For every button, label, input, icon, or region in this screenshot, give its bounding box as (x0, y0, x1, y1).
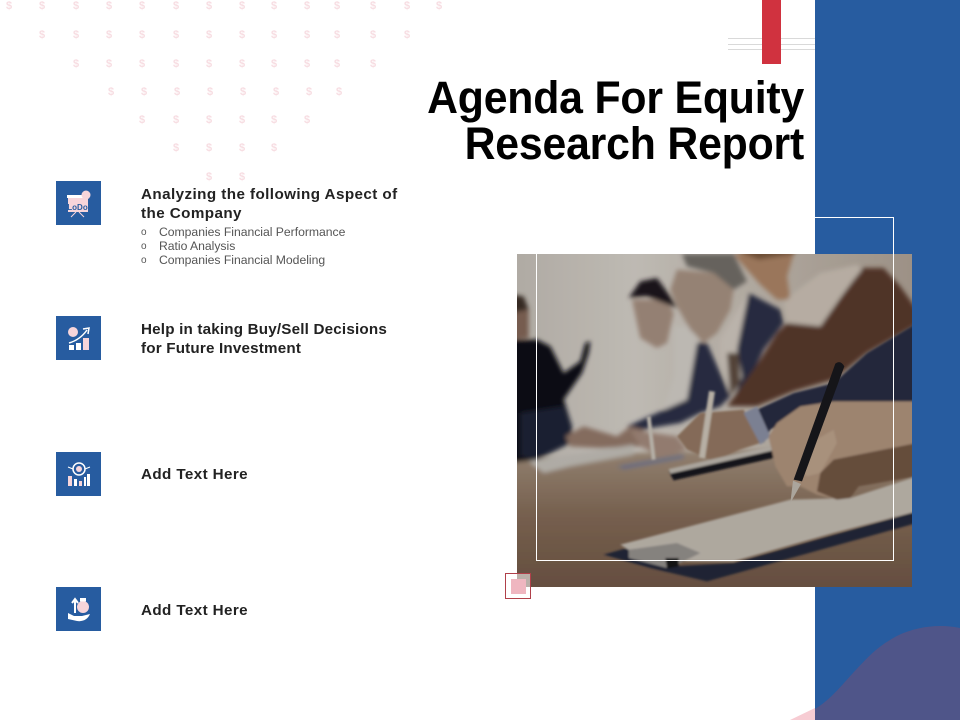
bullet list: o (141, 227, 147, 238)
dollar sign pattern: $ (173, 29, 179, 41)
dollar sign pattern: $ (139, 58, 145, 70)
dollar sign pattern: $ (239, 142, 245, 154)
dollar sign pattern: $ (206, 58, 212, 70)
heading: the Company (141, 205, 242, 222)
heading: Add Text Here (141, 466, 248, 483)
dollar sign pattern: $ (271, 29, 277, 41)
dollar sign pattern: $ (271, 0, 277, 12)
dollar sign pattern: $ (370, 29, 376, 41)
dollar sign pattern: $ (173, 114, 179, 126)
header accent: grey lines and red bar (728, 0, 815, 64)
dollar sign pattern: $ (139, 0, 145, 12)
dollar sign pattern: $ (173, 142, 179, 154)
dollar sign pattern: $ (73, 29, 79, 41)
dollar sign pattern: $ (304, 114, 310, 126)
icon: hand holding money bag (56, 587, 101, 631)
dollar sign pattern: $ (173, 0, 179, 12)
heading (141, 186, 398, 222)
dollar sign pattern: $ (206, 171, 212, 183)
title: Research Report (465, 118, 804, 169)
dollar sign pattern: $ (106, 29, 112, 41)
dollar sign pattern: $ (370, 58, 376, 70)
agenda item 3 (56, 452, 248, 496)
heading: Add Text Here (141, 602, 248, 619)
dollar sign pattern: $ (240, 86, 246, 98)
dollar sign pattern: $ (141, 86, 147, 98)
dollar sign pattern: $ (106, 58, 112, 70)
photo: business people writing at a table (517, 254, 912, 587)
dollar sign pattern: $ (106, 0, 112, 12)
dollar sign pattern: $ (139, 114, 145, 126)
pen (794, 362, 844, 481)
dollar sign pattern: $ (239, 114, 245, 126)
dollar sign pattern: $ (334, 0, 340, 12)
dollar sign pattern: $ (271, 142, 277, 154)
dollar sign pattern: $ (336, 86, 342, 98)
dollar sign pattern: $ (370, 0, 376, 12)
bullet list: Companies Financial Performance (159, 225, 345, 239)
dollar sign pattern: $ (304, 58, 310, 70)
small red square accent (505, 573, 531, 599)
dollar sign pattern: $ (239, 0, 245, 12)
bullet list (141, 225, 345, 267)
icon: target coin over bars (56, 452, 101, 496)
title: Agenda For Equity (427, 72, 804, 123)
agenda item 4 (56, 587, 248, 631)
dollar sign pattern: $ (271, 114, 277, 126)
white outline frame (536, 217, 894, 561)
bullet list: o (141, 255, 147, 266)
dollar sign pattern: $ (273, 86, 279, 98)
bullet list: Companies Financial Modeling (159, 253, 325, 267)
dollar sign pattern: $ (304, 0, 310, 12)
dollar sign pattern: $ (139, 29, 145, 41)
dollar sign pattern: $ (108, 86, 114, 98)
agenda item 1 (56, 181, 398, 267)
dollar sign pattern: $ (239, 29, 245, 41)
dollar sign pattern: $ (206, 0, 212, 12)
title (427, 72, 804, 169)
agenda item 2 (56, 316, 387, 360)
dollar sign pattern: $ (39, 29, 45, 41)
dollar sign pattern: $ (6, 0, 12, 12)
dollar sign pattern: $ (173, 58, 179, 70)
blue side panel (815, 0, 960, 720)
dollar sign pattern: $ (206, 114, 212, 126)
dollar sign pattern: $ (404, 29, 410, 41)
heading (141, 321, 387, 357)
bullet list: Ratio Analysis (159, 239, 235, 253)
dollar sign pattern: $ (239, 58, 245, 70)
icon: presentation board: LoDo (67, 203, 88, 212)
dollar sign pattern: $ (206, 142, 212, 154)
heading: Help in taking Buy/Sell Decisions (141, 321, 387, 338)
dollar sign pattern: $ (306, 86, 312, 98)
dollar sign pattern: $ (207, 86, 213, 98)
dollar sign pattern (6, 0, 442, 183)
dollar sign pattern: $ (206, 29, 212, 41)
decorative blob at bottom right (790, 626, 960, 720)
dollar sign pattern: $ (404, 0, 410, 12)
dollar sign pattern: $ (39, 0, 45, 12)
dollar sign pattern: $ (334, 29, 340, 41)
dollar sign pattern: $ (73, 58, 79, 70)
dollar sign pattern: $ (271, 58, 277, 70)
bullet list: o (141, 241, 147, 252)
dollar sign pattern: $ (73, 0, 79, 12)
dollar sign pattern: $ (304, 29, 310, 41)
dollar sign pattern: $ (239, 171, 245, 183)
heading: Analyzing the following Aspect of (141, 186, 398, 203)
dollar sign pattern: $ (174, 86, 180, 98)
dollar sign pattern: $ (436, 0, 442, 12)
icon: presentation board (56, 181, 101, 225)
dollar sign pattern: $ (334, 58, 340, 70)
heading: for Future Investment (141, 340, 301, 357)
icon: rising chart with coin (56, 316, 101, 360)
